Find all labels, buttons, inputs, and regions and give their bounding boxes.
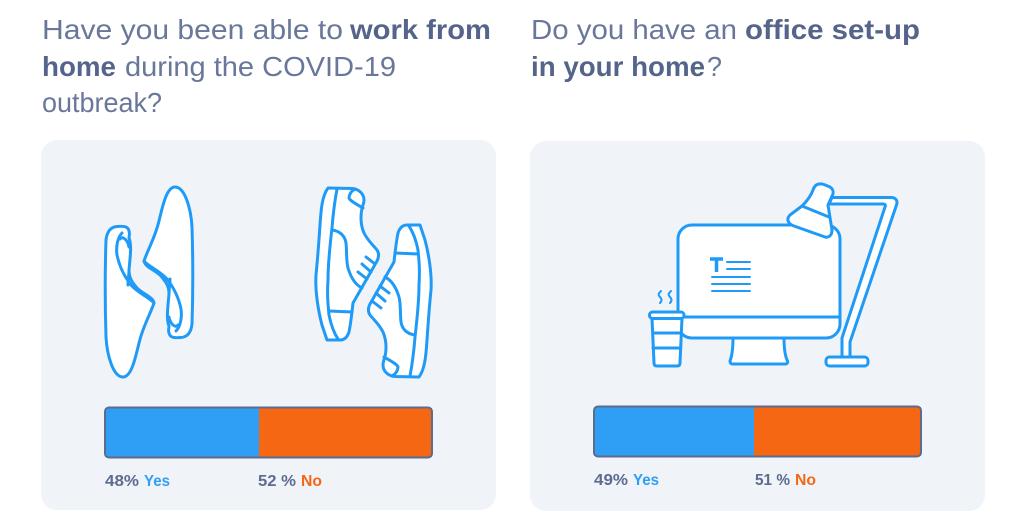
icon: lamp shade xyxy=(788,184,833,237)
legend: yes and no shares xyxy=(594,472,816,489)
bar chart: 48% yes, 52% no xyxy=(105,408,432,458)
heading: office set-up question: Do you have an xyxy=(531,14,737,45)
panel: work from home xyxy=(41,140,496,510)
legend: yes and no shares: Yes xyxy=(144,473,170,490)
heading: work from home question xyxy=(42,14,491,118)
legend: yes and no shares: No xyxy=(795,472,816,489)
icon: coffee cup with steam xyxy=(650,291,684,366)
icon: computer monitor xyxy=(678,225,840,364)
icon: slippers xyxy=(105,187,193,377)
heading: office set-up question: in your home xyxy=(531,51,705,82)
heading: work from home question: Have you been able to xyxy=(42,14,343,45)
heading: work from home question: during the COVID-19 xyxy=(125,51,396,82)
icon: lamp base xyxy=(826,357,868,366)
legend: yes and no shares: Yes xyxy=(633,472,659,489)
legend: yes and no shares: 48% xyxy=(105,473,139,490)
legend: yes and no shares: No xyxy=(301,473,322,490)
legend: yes and no shares: 52 % xyxy=(258,473,296,490)
heading: office set-up question xyxy=(531,14,920,82)
icon: letter T on screen xyxy=(710,259,723,272)
legend: yes and no shares: 49% xyxy=(594,472,628,489)
bar chart: 49% yes, 51% no xyxy=(594,406,921,456)
panel: office set-up xyxy=(530,141,985,511)
heading: office set-up question: ? xyxy=(707,51,722,82)
legend: yes and no shares: 51 % xyxy=(755,472,790,489)
icon: desk lamp arm xyxy=(829,198,897,358)
icon: sneakers xyxy=(316,188,431,377)
heading: office set-up question: office set-up xyxy=(745,14,920,45)
heading: work from home question: outbreak? xyxy=(42,87,162,118)
legend: yes and no shares xyxy=(105,473,322,490)
heading: work from home question: work from xyxy=(349,14,491,45)
heading: work from home question: home xyxy=(42,51,116,82)
